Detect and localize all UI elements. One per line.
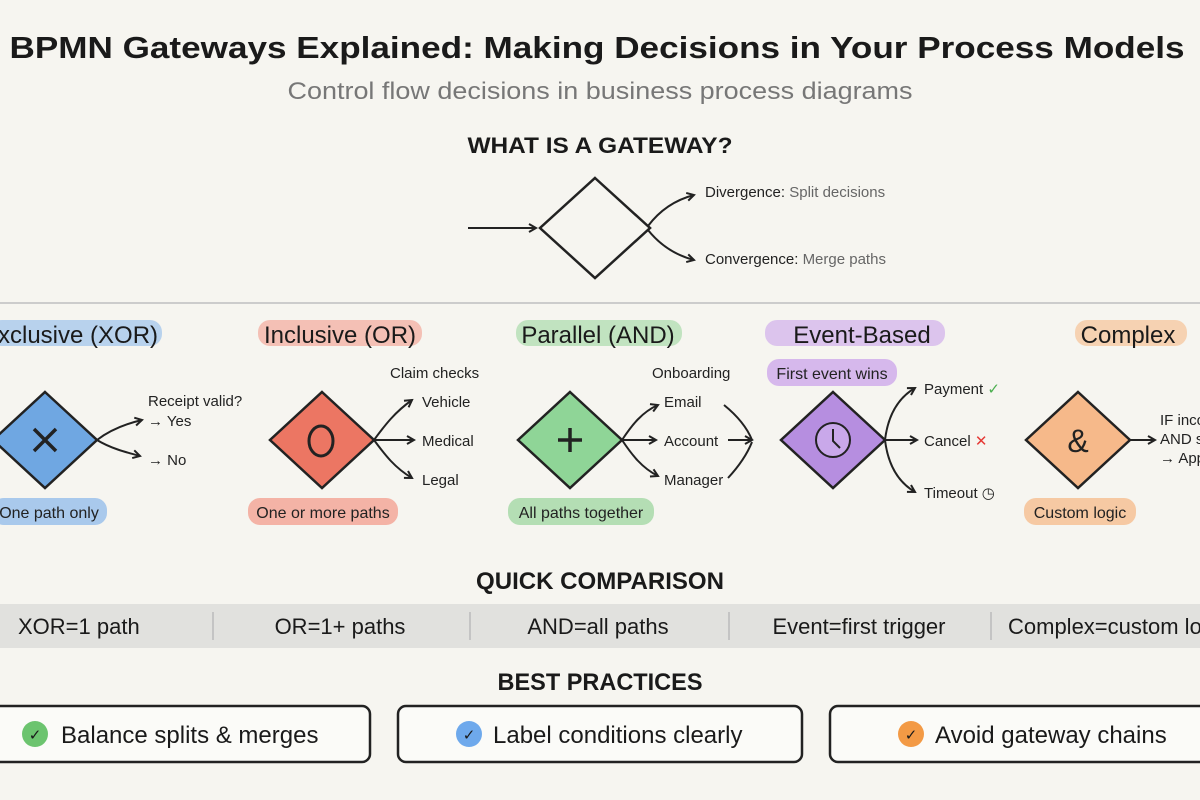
panel: exclusive XOR	[0, 320, 242, 525]
panel: parallel AND: Parallel (AND)	[521, 322, 675, 349]
best practice: balance	[0, 706, 370, 762]
panel: parallel AND: All paths together	[519, 505, 644, 522]
comparison table: XOR=1 path	[18, 614, 140, 639]
panel: event-based: Timeout ◷	[924, 485, 995, 502]
comparison table: Event=first trigger	[772, 614, 946, 639]
best practice: avoid chains: Avoid gateway chains	[935, 722, 1167, 749]
panel: inclusive OR	[248, 320, 479, 525]
comparison table: OR=1+ paths	[275, 614, 405, 639]
panel: parallel AND: Account	[664, 433, 719, 450]
comparison table: AND=all paths	[527, 614, 669, 639]
best practice: balance: ✓	[29, 727, 41, 744]
panel: complex: Complex	[1081, 322, 1175, 349]
heading: best practices: BEST PRACTICES	[498, 669, 702, 696]
panel: complex: Custom logic	[1034, 505, 1126, 522]
gateway concept diagram	[468, 178, 886, 278]
best practice: avoid chains	[830, 706, 1200, 762]
panel: inclusive OR: One or more paths	[256, 505, 390, 522]
comparison table	[0, 604, 1200, 648]
best practice: avoid chains: ✓	[905, 727, 917, 744]
panel: exclusive XOR: Receipt valid?	[148, 393, 242, 410]
panel: event-based	[765, 320, 1000, 502]
panel: exclusive XOR: One path only	[0, 505, 99, 522]
gateway concept diagram: Convergence: Merge paths	[705, 251, 886, 268]
panel: event-based: Payment ✓	[924, 381, 1000, 398]
best practice: label	[398, 706, 802, 762]
panel: complex: &	[1067, 423, 1089, 459]
gateway concept diagram: Divergence: Split decisions	[705, 184, 885, 201]
panel: inclusive OR: Claim checks	[390, 365, 479, 382]
best practice: balance: Balance splits & merges	[61, 722, 318, 749]
panel: parallel AND: Email	[664, 394, 702, 411]
panel: inclusive OR: Vehicle	[422, 394, 470, 411]
best practice: label: Label conditions clearly	[493, 722, 742, 749]
panel: inclusive OR: Inclusive (OR)	[264, 322, 416, 349]
panel: exclusive XOR: → Yes	[148, 413, 191, 430]
panel: event-based: Cancel ✕	[924, 433, 987, 450]
panel: event-based: Event-Based	[793, 322, 931, 349]
panel: inclusive OR: Medical	[422, 433, 474, 450]
panel: parallel AND: Manager	[664, 472, 723, 489]
panel: exclusive XOR: → No	[148, 452, 186, 469]
heading: what is a gateway: WHAT IS A GATEWAY?	[468, 133, 732, 158]
panel: event-based: First event wins	[776, 366, 888, 383]
panel: complex	[1024, 320, 1200, 525]
subtitle: Control flow decisions in business process diagrams	[288, 78, 912, 105]
panel: parallel AND	[508, 320, 752, 525]
title: BPMN Gateways Explained: Making Decisions in Your Process Models	[10, 30, 1184, 65]
panel: inclusive OR: Legal	[422, 472, 459, 489]
panel: parallel AND: Onboarding	[652, 365, 730, 382]
best practice: label: ✓	[463, 727, 475, 744]
heading: quick comparison: QUICK COMPARISON	[476, 568, 724, 595]
